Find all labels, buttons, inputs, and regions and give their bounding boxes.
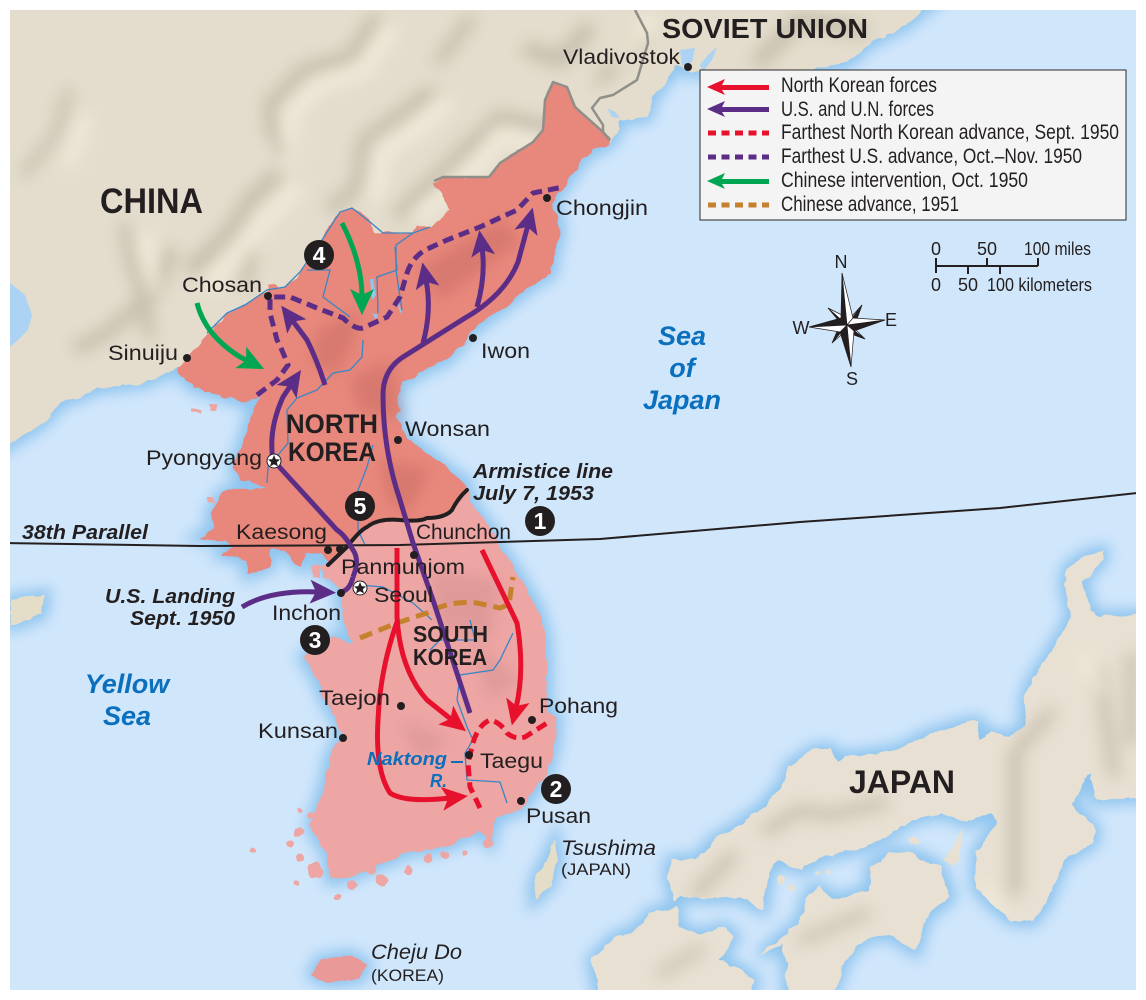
- southern islands: [192, 404, 493, 900]
- Chinese advance 1951 dashed line: [360, 577, 513, 638]
- North Korea label: NORTH: [286, 409, 378, 439]
- annotation: 38th parallel: 38th Parallel: [22, 522, 148, 544]
- scale bar: 50: [958, 275, 978, 295]
- city labels: Taejon: [319, 687, 390, 710]
- city labels: Chongjin: [556, 197, 648, 220]
- annotation: armistice line: Armistice line: [472, 461, 613, 483]
- city labels: Panmunjom: [341, 556, 465, 579]
- branch to the northeast: [477, 248, 483, 307]
- numbered marker 5: 5: [354, 493, 367, 519]
- city dots: [183, 63, 692, 805]
- land: China and Soviet Union: [0, 0, 937, 450]
- scale bar: [931, 239, 1092, 295]
- compass rose: E: [885, 310, 897, 330]
- legend: farthest U.S. advance: Farthest U.S. advance, Oct.–Nov. 1950: [781, 145, 1082, 168]
- legend: U.S. and U.N. forces: [707, 98, 934, 121]
- city labels: Inchon: [272, 602, 341, 625]
- annotation: U.S. landing: Sept. 1950: [130, 608, 235, 630]
- Sea of Japan label: Sea: [658, 321, 706, 351]
- numbered marker 2: 2: [550, 776, 562, 802]
- Sea of Japan label: of: [669, 353, 698, 383]
- city labels: Chunchon: [416, 521, 511, 544]
- terrain shading: Korea: [310, 220, 520, 510]
- U.S. and U.N. forces arrows: [242, 225, 528, 713]
- compass rose: N: [834, 252, 848, 272]
- annotation: Naktong River: R.: [430, 771, 447, 791]
- city labels: [108, 46, 681, 828]
- armistice line: [328, 490, 467, 565]
- city labels: Iwon: [481, 340, 530, 363]
- scale bar: 100 miles: [1024, 239, 1091, 259]
- Sea of Japan label: Japan: [643, 385, 721, 415]
- rivers: [207, 208, 513, 803]
- Cheju Do label: (KOREA): [371, 966, 444, 985]
- scale bar: 100 kilometers: [987, 275, 1092, 295]
- numbered marker 3: [300, 625, 330, 655]
- Seoul link: [341, 577, 353, 592]
- central route: [397, 548, 452, 720]
- lakes: [370, 279, 402, 320]
- numbered marker 4: [304, 240, 334, 270]
- South Korea label: SOUTH: [413, 621, 488, 647]
- branch to the Yalu: [423, 280, 428, 343]
- 38th parallel line: [0, 492, 1146, 546]
- Yellow Sea label: Sea: [103, 701, 151, 731]
- city labels: Taegu: [480, 750, 543, 773]
- land: Japan: [10, 551, 1146, 1000]
- country labels: CHINA: [100, 182, 203, 221]
- city labels: Sinuiju: [108, 342, 178, 365]
- Tsushima label: (JAPAN): [561, 860, 631, 879]
- numbered marker 1: 1: [534, 508, 547, 534]
- annotation: armistice line: July 7, 1953: [473, 483, 594, 505]
- Soviet border line: [434, 10, 648, 181]
- compass rose: [792, 252, 897, 389]
- annotation: U.S. landing: [105, 586, 235, 630]
- arrow near Chosan: [197, 303, 248, 361]
- Yellow Sea label: Yellow: [85, 669, 171, 699]
- city labels: Kaesong: [236, 521, 327, 544]
- compass rose: S: [846, 369, 858, 389]
- city labels: Pusan: [526, 805, 591, 828]
- scale bar: 0: [931, 239, 941, 259]
- legend: [700, 70, 1126, 220]
- annotation: Naktong River: [367, 749, 463, 791]
- Cheju Do island: [312, 955, 367, 982]
- North Korea label: KOREA: [288, 437, 376, 467]
- legend: North Korean forces: North Korean forces: [781, 74, 937, 97]
- Korea landmass: [177, 82, 610, 982]
- western route through Pyongyang: [272, 385, 356, 577]
- city labels: Vladivostok: [563, 46, 681, 69]
- compass rose: W: [792, 318, 810, 338]
- North Korean forces arrows: [378, 548, 521, 800]
- Sea of Japan label: [643, 321, 721, 415]
- country labels: [100, 13, 955, 800]
- South Korea: [303, 487, 557, 880]
- legend: Chinese intervention: [707, 169, 1028, 192]
- North Korea label: [286, 409, 378, 467]
- bays on the northern coast: [10, 47, 717, 347]
- farthest U.S. advance dashed line: [257, 187, 563, 395]
- numbered marker 5: [345, 491, 375, 521]
- eastern route: [482, 550, 521, 708]
- scale bar: 0: [931, 275, 941, 295]
- city labels: Pohang: [539, 695, 618, 718]
- U.S. landing arrow: [242, 592, 318, 607]
- branch to Chosan: [292, 320, 325, 385]
- legend: North Korean forces: [707, 74, 937, 97]
- arrow in the north: [342, 223, 362, 297]
- capital star: Pyongyang: [267, 454, 281, 468]
- North Korea: [177, 82, 610, 575]
- annotation: U.S. landing: U.S. Landing: [105, 586, 235, 608]
- Tsushima label: [561, 837, 656, 879]
- capital star: Seoul: [353, 581, 367, 595]
- numbered marker 3: 3: [309, 627, 321, 653]
- annotation: Naktong River: Naktong: [367, 749, 447, 769]
- Tsushima label: Tsushima: [561, 837, 656, 860]
- western route: [378, 622, 450, 800]
- country labels: SOVIET UNION: [662, 13, 868, 44]
- country labels: JAPAN: [849, 764, 955, 800]
- South Korea label: KOREA: [413, 644, 487, 670]
- South Korea label: [413, 621, 488, 670]
- city labels: Kunsan: [258, 720, 338, 743]
- Cheju Do label: [371, 941, 462, 985]
- city labels: Chosan: [182, 274, 262, 297]
- Yellow Sea label: [85, 669, 171, 731]
- farthest North Korean advance dashed line: [468, 720, 547, 808]
- scale bar: 50: [977, 239, 997, 259]
- annotation: armistice line: [472, 461, 613, 505]
- numbered marker 4: 4: [313, 242, 326, 268]
- eastern trunk to Chongjin: [383, 225, 528, 713]
- city labels: Seoul: [374, 584, 433, 607]
- legend: Chinese advance: Chinese advance, 1951: [781, 193, 959, 216]
- Cheju Do label: Cheju Do: [371, 941, 462, 964]
- city labels: Pyongyang: [146, 447, 262, 470]
- numbered marker 1: [525, 506, 555, 536]
- city labels: Wonsan: [405, 418, 490, 441]
- numbered marker 2: [541, 774, 571, 804]
- legend: Chinese intervention: Chinese intervention, Oct. 1950: [781, 169, 1028, 192]
- Chinese intervention arrows: [197, 223, 362, 361]
- legend: U.S. and U.N. forces: U.S. and U.N. forces: [781, 98, 934, 121]
